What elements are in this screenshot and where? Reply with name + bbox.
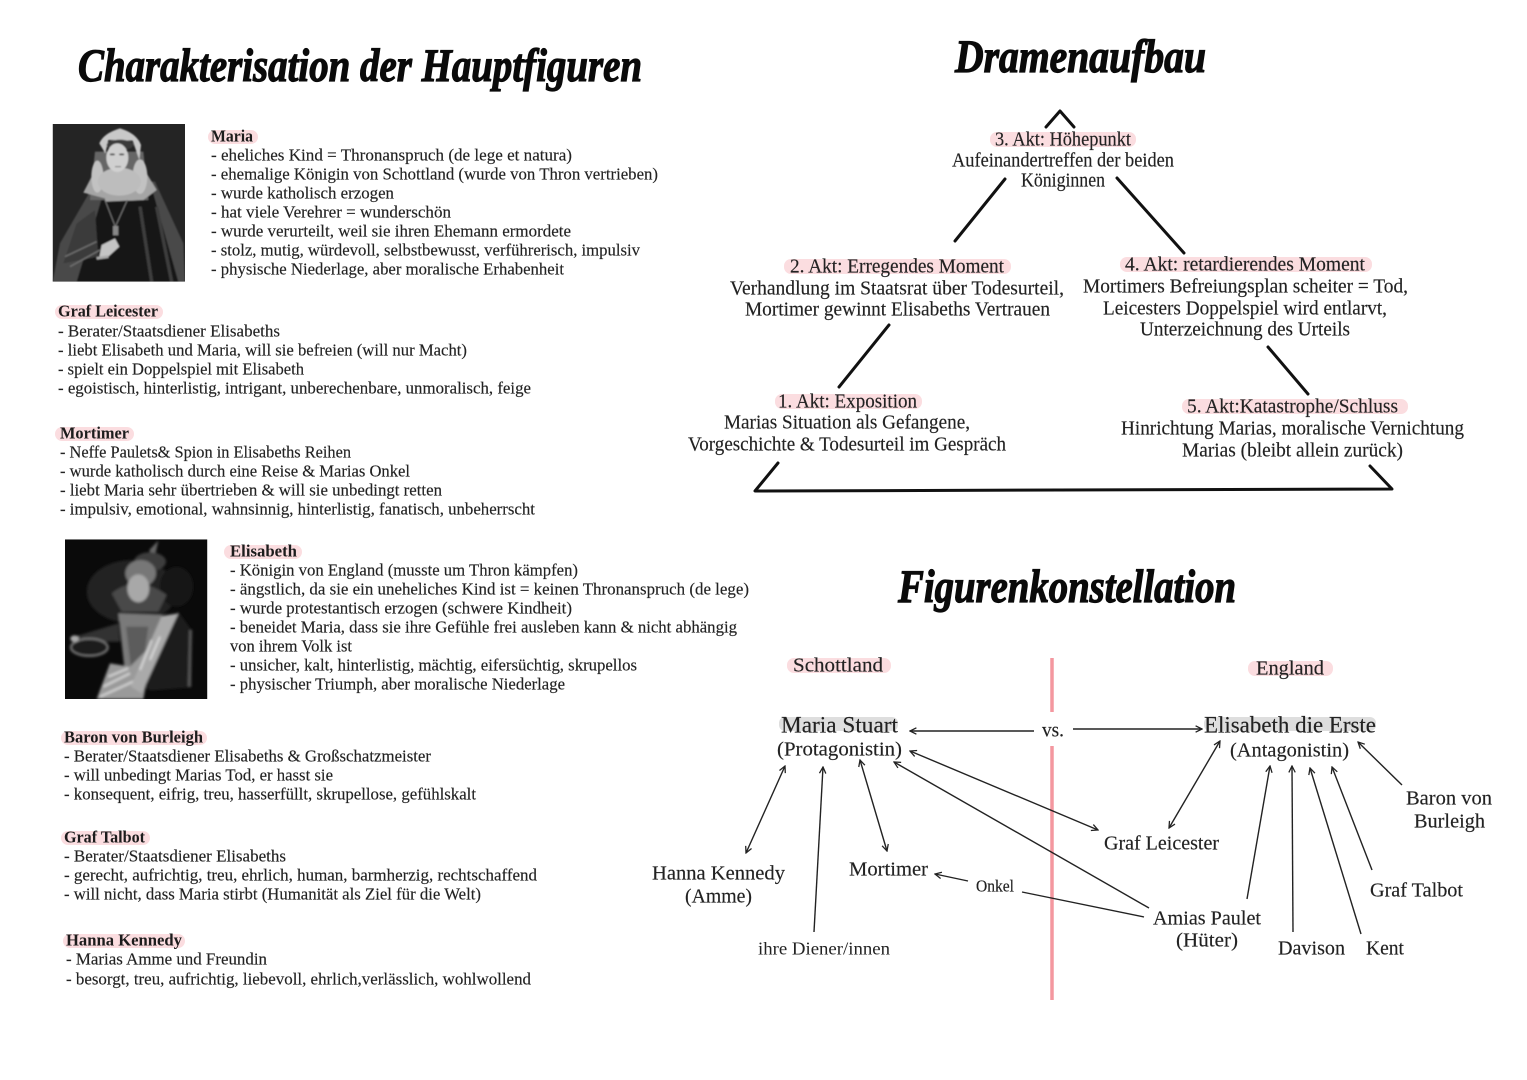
- text block: Graf Leicester: Graf Leicester: [58, 302, 158, 321]
- diagram: Dramenaufbau triangle: [688, 111, 1464, 491]
- text block: Elisabeth: Elisabeth: [230, 542, 298, 561]
- act 4: 4. Akt: retardierendes Moment: [1125, 254, 1365, 276]
- text block: Maria: Maria: [211, 127, 253, 146]
- triangle strokes: [755, 111, 1392, 491]
- act 2: [730, 256, 1064, 321]
- node: Baron von Burleigh: Burleigh: [1414, 811, 1485, 833]
- node: Mortimer: Mortimer: [849, 859, 928, 881]
- node: Amias Paulet: (Hüter): [1176, 930, 1238, 952]
- act 4: Leicesters Doppelspiel wird entlarvt,: [1103, 298, 1387, 320]
- node: Elisabeth die Erste: [1204, 713, 1376, 762]
- node: Graf Talbot: Graf Talbot: [1370, 880, 1463, 902]
- node: ihre Diener/innen: ihre Diener/innen: [758, 939, 890, 959]
- act 5: Marias (bleibt allein zurück): [1182, 440, 1403, 462]
- text block: Hanna Kennedy: - Marias Amme und Freundin: [66, 950, 267, 969]
- node: Hanna Kennedy: [652, 863, 785, 908]
- text block: Elisabeth: - ängstlich, da sie ein uneheliches Kind ist = keinen Thronanspruch (de lege): [230, 580, 749, 599]
- act 2: Mortimer gewinnt Elisabeths Vertrauen: [745, 299, 1050, 321]
- text block: Mortimer: - wurde katholisch durch eine Reise & Marias Onkel: [60, 462, 410, 481]
- act 1: [688, 391, 1006, 456]
- text block: Elisabeth: - unsicher, kalt, hinterlistig, mächtig, eifersüchtig, skrupellos: [230, 656, 637, 675]
- title: Charakterisation der Hauptfiguren: Charakterisation der Hauptfiguren: [78, 40, 642, 92]
- act 1: Vorgeschichte & Todesurteil im Gespräch: [688, 434, 1006, 456]
- text block: Maria: - eheliches Kind = Thronanspruch (de lege et natura): [211, 146, 572, 165]
- node: Hanna Kennedy: Hanna Kennedy: [652, 863, 785, 885]
- act 4: [1083, 254, 1408, 341]
- text block: Maria: - wurde verurteilt, weil sie ihren Ehemann ermordete: [211, 222, 571, 241]
- text block: Maria: - physische Niederlage, aber moralische Erhabenheit: [211, 260, 564, 279]
- text block: Graf Leicester: - egoistisch, hinterlistig, intrigant, unberechenbare, unmoralisch, feige: [58, 379, 531, 398]
- text block: Baron von Burleigh: Baron von Burleigh: [64, 728, 204, 747]
- text block: Graf Talbot: [61, 828, 537, 904]
- text block: Elisabeth: von ihrem Volk ist: [230, 637, 352, 656]
- text block: Graf Talbot: - gerecht, aufrichtig, treu, ehrlich, human, barmherzig, rechtschaffend: [64, 866, 537, 885]
- act 5: [1121, 396, 1464, 462]
- text block: Graf Leicester: - liebt Elisabeth und Maria, will sie befreien (will nur Macht): [58, 341, 467, 360]
- heading: Schottland: Schottland: [793, 655, 883, 677]
- node: Maria Stuart: [777, 713, 902, 761]
- text block: Mortimer: - impulsiv, emotional, wahnsinnig, hinterlistig, fanatisch, unbeherrscht: [60, 500, 535, 519]
- act 1: Marias Situation als Gefangene,: [724, 412, 970, 434]
- node: Amias Paulet: Amias Paulet: [1153, 908, 1261, 930]
- text block: Baron von Burleigh: - Berater/Staatsdiener Elisabeths & Großschatzmeister: [64, 747, 431, 766]
- text block: Baron von Burleigh: - will unbedingt Marias Tod, er hasst sie: [64, 766, 333, 785]
- text block: Mortimer: - Neffe Paulets& Spion in Elisabeths Reihen: [60, 443, 351, 462]
- heading: England: England: [1256, 658, 1324, 680]
- node: Maria Stuart: Maria Stuart: [781, 713, 899, 738]
- text block: Elisabeth: - beneidet Maria, dass sie ihre Gefühle frei ausleben kann & nicht abhängig: [230, 618, 737, 637]
- node: Baron von Burleigh: Baron von: [1406, 788, 1492, 810]
- text block: Elisabeth: - wurde protestantisch erzogen (schwere Kindheit): [230, 599, 572, 618]
- node: Elisabeth die Erste: (Antagonistin): [1230, 740, 1349, 762]
- text block: Hanna Kennedy: - besorgt, treu, aufrichtig, liebevoll, ehrlich,verlässlich, wohlwollend: [66, 970, 531, 989]
- arrows: [746, 729, 1402, 934]
- text block: Maria: - stolz, mutig, würdevoll, selbstbewusst, verführerisch, impulsiv: [211, 241, 640, 260]
- node: Elisabeth die Erste: Elisabeth die Erste: [1204, 713, 1376, 738]
- act 5: 5. Akt:Katastrophe/Schluss: [1187, 396, 1398, 418]
- text block: Mortimer: - liebt Maria sehr übertrieben & will sie unbedingt retten: [60, 481, 442, 500]
- node: Hanna Kennedy: (Amme): [685, 886, 752, 908]
- node: Maria Stuart: (Protagonistin): [777, 739, 902, 761]
- text block: Hanna Kennedy: [63, 931, 531, 989]
- act 2: Verhandlung im Staatsrat über Todesurteil,: [730, 278, 1064, 300]
- text block: Elisabeth: - physischer Triumph, aber moralische Niederlage: [230, 675, 565, 694]
- text block: Elisabeth: - Königin von England (musste um Thron kämpfen): [230, 561, 578, 580]
- act 3: Königinnen: [1021, 170, 1105, 192]
- text block: Graf Talbot: Graf Talbot: [64, 828, 145, 847]
- act 3: [952, 129, 1174, 192]
- text block: Mortimer: Mortimer: [60, 424, 129, 443]
- label: Onkel: Onkel: [976, 877, 1014, 896]
- act 5: Hinrichtung Marias, moralische Vernichtung: [1121, 418, 1464, 440]
- label: vs.: vs.: [1042, 720, 1064, 742]
- diagram: Figurenkonstellation: [652, 655, 1492, 1000]
- text block: Maria: - ehemalige Königin von Schottland (wurde von Thron vertrieben): [211, 165, 658, 184]
- title: Dramenaufbau: Dramenaufbau: [954, 31, 1206, 83]
- text block: Graf Talbot: - Berater/Staatsdiener Elisabeths: [64, 847, 286, 866]
- text block: Graf Leicester: [55, 302, 531, 398]
- text block: Elisabeth: [224, 542, 749, 694]
- act 4: Mortimers Befreiungsplan scheiter = Tod,: [1083, 276, 1408, 298]
- text block: Baron von Burleigh: [61, 728, 476, 804]
- act 4: Unterzeichnung des Urteils: [1140, 319, 1350, 341]
- act 2: 2. Akt: Erregendes Moment: [790, 256, 1004, 278]
- red divider: [1050, 658, 1054, 1000]
- title: Figurenkonstellation: Figurenkonstellation: [897, 561, 1236, 613]
- text block: Graf Leicester: - spielt ein Doppelspiel mit Elisabeth: [58, 360, 304, 379]
- act 3: 3. Akt: Höhepunkt: [995, 129, 1131, 151]
- text block: Graf Leicester: - Berater/Staatsdiener Elisabeths: [58, 322, 280, 341]
- text block: Maria: [208, 127, 658, 279]
- text block: Baron von Burleigh: - konsequent, eifrig, treu, hasserfüllt, skrupellose, gefühlskalt: [64, 785, 476, 804]
- text block: Maria: - hat viele Verehrer = wunderschön: [211, 203, 451, 222]
- text block: Maria: - wurde katholisch erzogen: [211, 184, 394, 203]
- portrait: Maria: [53, 124, 185, 282]
- node: Graf Leicester: Graf Leicester: [1104, 833, 1219, 855]
- text block: Mortimer: [55, 424, 535, 519]
- node: Baron von Burleigh: [1406, 788, 1492, 833]
- text block: Graf Talbot: - will nicht, dass Maria stirbt (Humanität als Ziel für die Welt): [64, 885, 481, 904]
- text block: Hanna Kennedy: Hanna Kennedy: [66, 931, 182, 950]
- node: Davison: Davison: [1278, 938, 1345, 960]
- portrait: Elisabeth: [65, 539, 207, 699]
- act 1: 1. Akt: Exposition: [778, 391, 917, 413]
- node: Kent: Kent: [1366, 938, 1404, 960]
- act 3: Aufeinandertreffen der beiden: [952, 150, 1174, 172]
- node: Amias Paulet: [1153, 908, 1261, 952]
